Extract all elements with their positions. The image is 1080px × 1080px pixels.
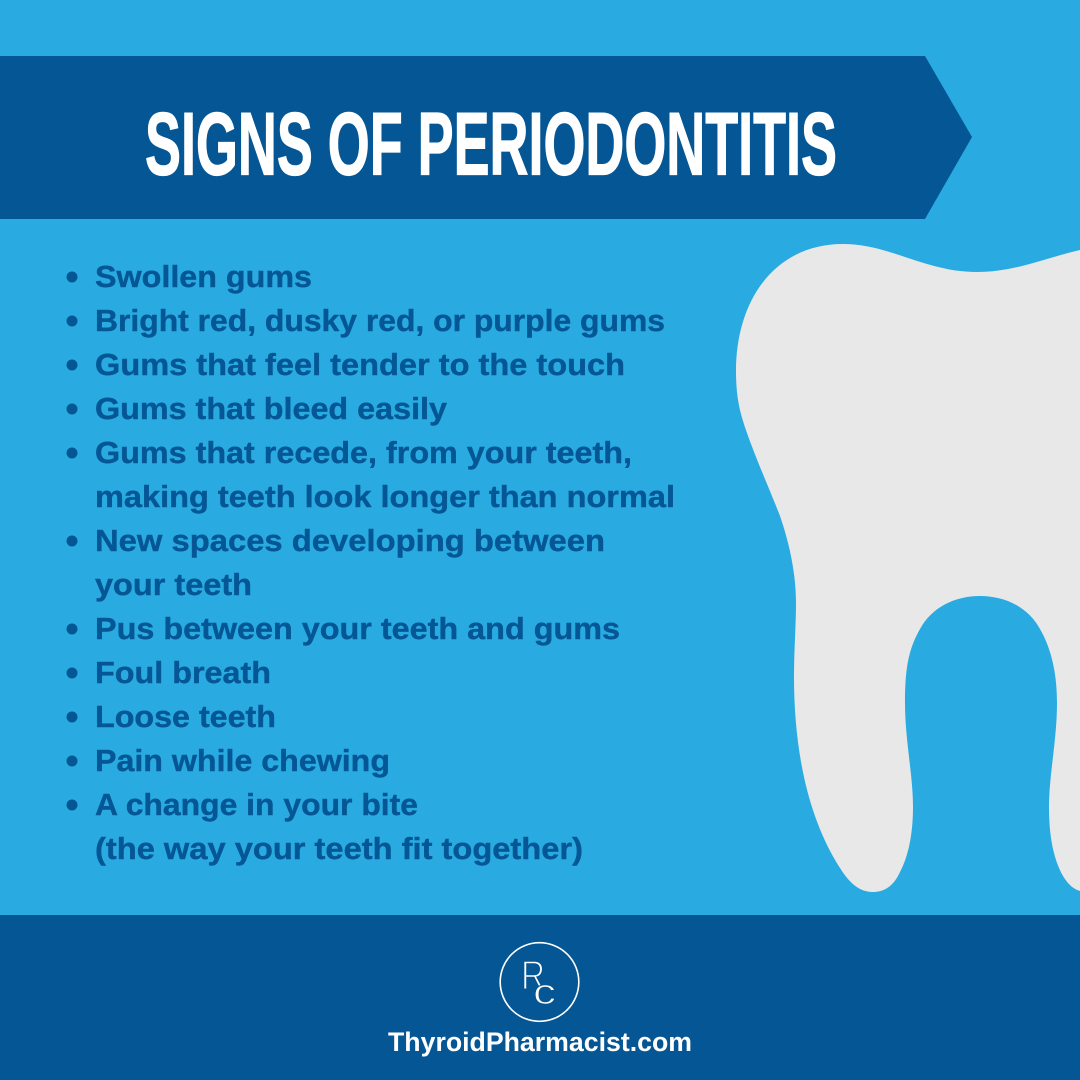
icon: RC logo: R xyxy=(521,952,545,998)
list item: pain while chewing: Pain while chewing xyxy=(95,743,390,778)
list item: new spaces xyxy=(66,523,605,602)
list item: bleeding gums: Gums that bleed easily xyxy=(95,391,448,426)
icon: tooth illustration xyxy=(736,244,1080,892)
list of periodontitis signs xyxy=(66,259,675,866)
website url: ThyroidPharmacist.com xyxy=(388,1027,692,1057)
list item: change in bite: A change in your bite xyxy=(95,787,418,822)
footer band xyxy=(0,915,1080,1080)
list item: gum colour: Bright red, dusky red, or purple gums xyxy=(95,303,665,338)
list item: foul breath: Foul breath xyxy=(95,655,271,690)
list item: new spaces: your teeth xyxy=(95,567,252,602)
list item: change in bite xyxy=(66,787,583,866)
title banner xyxy=(0,56,972,219)
list item: receding gums: making teeth look longer than normal xyxy=(95,479,675,514)
list item: tender gums: Gums that feel tender to the touch xyxy=(95,347,625,382)
list item: swollen gums: Swollen gums xyxy=(95,259,312,294)
list item: new spaces: New spaces developing between xyxy=(95,523,605,558)
list item: pus: Pus between your teeth and gums xyxy=(95,611,620,646)
list item: receding gums xyxy=(66,435,675,514)
icon: RC logo xyxy=(500,943,579,1021)
icon: RC logo: c xyxy=(533,971,556,1012)
list item: change in bite: (the way your teeth fit together) xyxy=(95,831,583,866)
list item: receding gums: Gums that recede, from your teeth, xyxy=(95,435,632,470)
list item: loose teeth: Loose teeth xyxy=(95,699,276,734)
